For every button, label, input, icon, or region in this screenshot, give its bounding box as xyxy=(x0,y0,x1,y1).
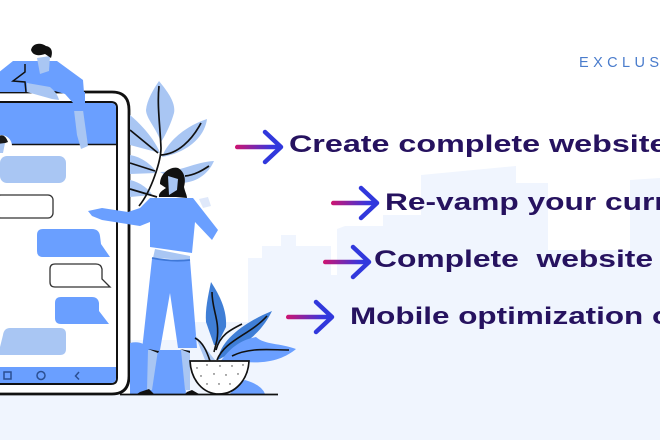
pot xyxy=(190,361,249,394)
arrow 4 xyxy=(286,302,332,332)
nav icons xyxy=(4,372,79,380)
arrow 2 xyxy=(331,188,377,218)
phone header bar xyxy=(0,103,116,144)
large plant xyxy=(130,81,214,206)
small avatar xyxy=(0,135,12,157)
background city skyline xyxy=(0,166,660,440)
man leaning over phone xyxy=(0,44,88,149)
potted plant xyxy=(190,282,296,394)
chat bubble blue 1 xyxy=(37,229,110,257)
phone illustration xyxy=(0,92,129,394)
item: complete website: Complete website xyxy=(374,245,653,272)
chat bubble outline 2 xyxy=(50,264,110,287)
phone nav bar xyxy=(0,367,116,383)
ground line xyxy=(120,394,278,396)
arrow 1 xyxy=(235,132,281,162)
woman pointing xyxy=(88,168,218,394)
chat bubble blue 2 xyxy=(55,297,109,324)
blue mound behind woman xyxy=(130,342,186,394)
chat bubble light 1 xyxy=(0,156,66,183)
chat bubble outline 1 xyxy=(0,195,53,218)
arrow 3 xyxy=(323,247,369,277)
chat bubble light 2 xyxy=(0,328,66,355)
lower legs xyxy=(147,350,158,390)
